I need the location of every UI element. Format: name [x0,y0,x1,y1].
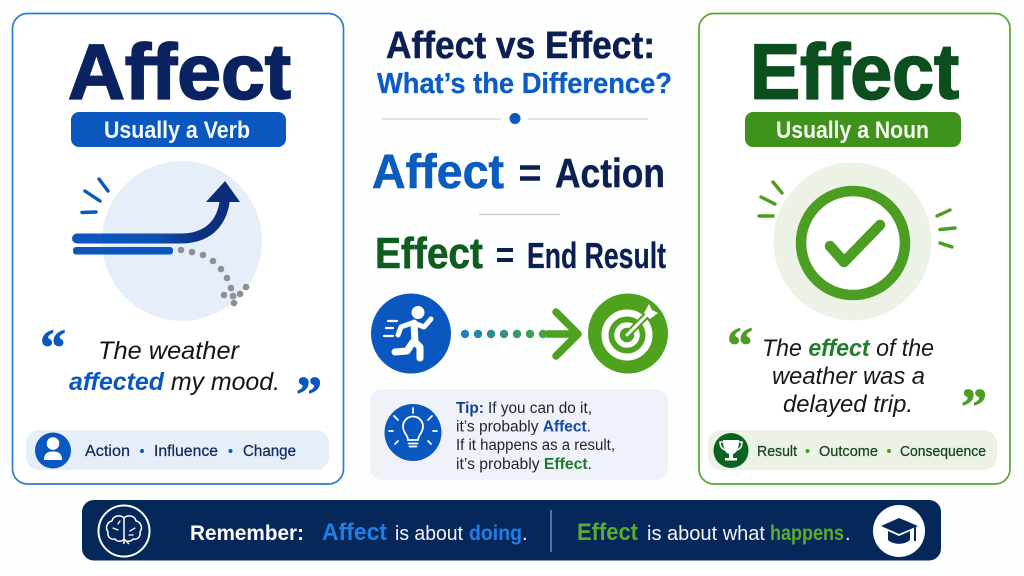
quote: the weather affected my mood: affected my mood. [69,368,280,396]
keyword strip: action influence change: Action [85,443,130,460]
badge: usually a verb: Usually a Verb [104,117,250,144]
badge: usually a verb [71,112,286,147]
banner: remember: doing [469,522,522,545]
icon: runner [371,294,451,374]
banner: remember: is about [395,523,463,545]
equation: affect = action [372,146,665,199]
title [377,25,672,100]
equation: effect = end result: Effect [375,229,483,278]
icon: check mark illustration [759,162,955,320]
quote: the effect of the weather [727,318,987,436]
quote: the effect of the weather: delayed trip. [783,391,913,418]
tip text [456,400,615,473]
icon: person [35,432,71,468]
equation: affect = action: Affect [372,146,504,199]
quote: the effect of the weather: “ [727,318,753,375]
equation: effect = end result: End Result [527,235,666,276]
keyword strip: action influence change: Change [243,443,296,460]
keyword strip: result outcome consequence: Outcome [819,444,878,460]
quote: the effect of the weather: weather was a [772,363,925,390]
keyword strip: result outcome consequence: Consequence [900,444,986,460]
arrow: dotted action to result [461,312,578,356]
equation: effect = end result [375,229,666,278]
tip text: it’s probably Affect. [456,418,591,436]
banner: remember: . [522,523,528,545]
tip text: it’s probably Effect. [456,456,592,473]
icon: light bulb [384,404,442,461]
quote: the weather affected my mood [40,320,322,424]
divider with dot [382,113,648,124]
icon: brain [98,506,150,556]
panel: tip [370,389,668,480]
equation: affect = action: Action [555,150,665,196]
banner: remember: Remember: [190,522,304,545]
quote: the weather affected my mood: The weather [98,337,241,365]
panel: effect [699,14,1010,484]
quote: the weather affected my mood: ” [296,367,322,424]
quote: the weather affected my mood: “ [40,320,66,377]
keyword strip: action influence change: Influence [154,443,218,460]
keyword strip: result outcome consequence: Result [757,444,797,460]
banner: remember: . [845,523,851,545]
banner: remember [82,500,941,560]
icon: target [588,294,668,374]
quote: the effect of the weather: The effect of the [762,335,934,362]
panel: affect [12,14,344,484]
keyword strip: action influence change [26,430,329,470]
affect heading: Affect [68,28,291,116]
icon: redirected arrow illustration [73,161,262,321]
title: Affect vs Effect: [386,25,655,67]
badge: usually a noun [745,112,961,147]
effect heading: Effect [750,28,959,116]
tip text: If it happens as a result, [456,437,615,454]
badge: usually a noun: Usually a Noun [776,117,929,144]
banner: remember: Effect [577,519,638,546]
icon: graduation cap [873,505,925,557]
tip text: Tip: If you can do it, [456,400,592,417]
quote: the effect of the weather: ” [961,379,987,436]
banner: remember: happens [770,522,844,545]
banner: remember: is about what [647,523,765,545]
icon: trophy [714,433,748,468]
title: What’s the Difference? [377,68,672,100]
keyword strip: result outcome consequence [708,430,997,470]
banner: remember: Affect [322,519,387,546]
